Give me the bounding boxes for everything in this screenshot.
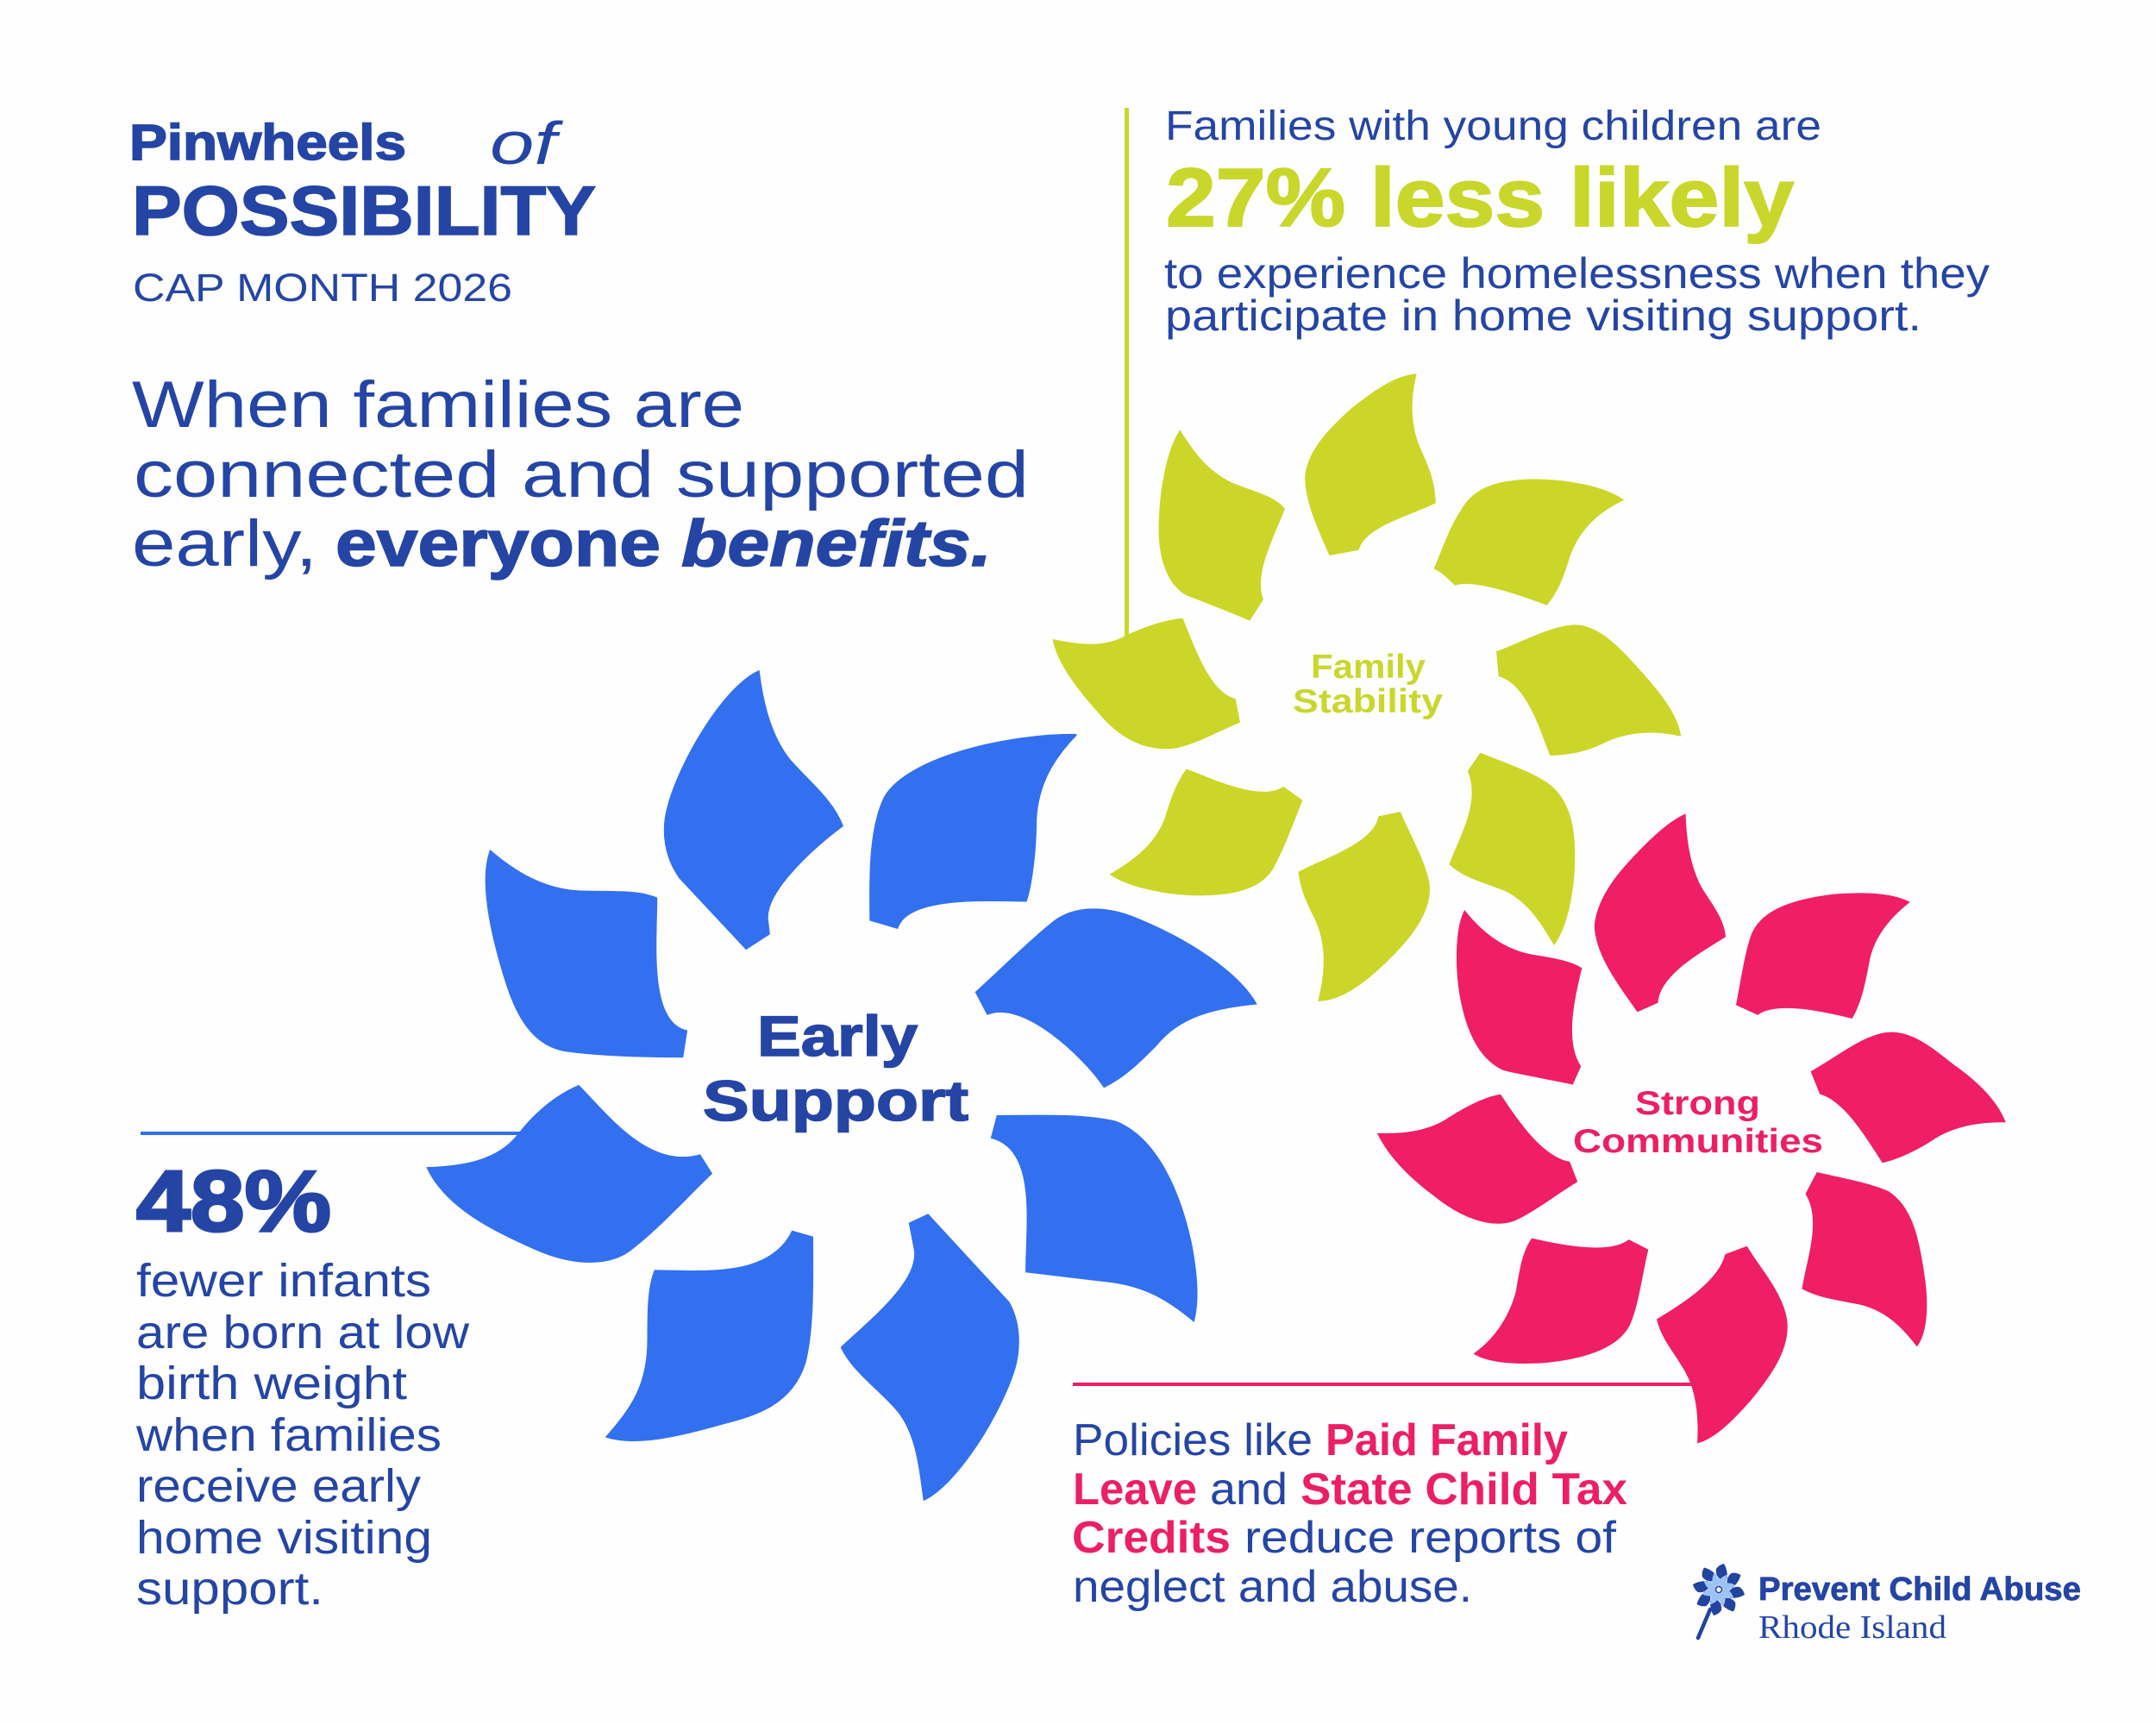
callout: 48% fewer infants: home visiting bbox=[136, 1512, 432, 1564]
pinwheel: early support bbox=[428, 671, 1256, 1500]
title: Pinwheels of Possibility: Pinwheels bbox=[129, 115, 406, 171]
label: early support: Early bbox=[757, 1004, 918, 1068]
callout: policies: reduce reports of bbox=[1244, 1513, 1617, 1563]
icon: small pinwheel bbox=[1693, 1564, 1745, 1638]
callout: 27% less likely: Families with young children are bbox=[1165, 104, 1821, 149]
callout: 27% less likely: participate in home visiting support. bbox=[1165, 292, 1921, 340]
title: Pinwheels of Possibility: of bbox=[490, 110, 564, 177]
headline statement: When families are bbox=[132, 368, 744, 442]
subtitle: CAP Month 2026: CAP MONTH 2026 bbox=[133, 266, 512, 310]
callout: 48% fewer infants: are born at low bbox=[136, 1307, 470, 1358]
headline statement: connected and supported bbox=[134, 438, 1029, 511]
title: Pinwheels of Possibility: POSSIBILITY bbox=[132, 172, 596, 250]
label: family stability: Family bbox=[1311, 649, 1426, 686]
callout: 27% less likely: 27% less likely bbox=[1166, 152, 1794, 244]
label: family stability bbox=[1293, 649, 1443, 720]
callout: policies: neglect and abuse. bbox=[1073, 1562, 1472, 1612]
headline statement: early, bbox=[132, 507, 317, 580]
connector line: strong communities bbox=[1073, 1383, 1695, 1386]
headline statement: benefits. bbox=[681, 507, 992, 580]
callout: policies: State Child Tax bbox=[1300, 1465, 1627, 1515]
title: Pinwheels of Possibility bbox=[129, 110, 596, 250]
label: early support: Support bbox=[703, 1069, 968, 1132]
logo: Prevent Child Abuse Rhode Island: Prevent Child Abuse bbox=[1758, 1571, 2081, 1608]
pinwheel: family stability bbox=[1053, 374, 1680, 1000]
callout: 27% less likely bbox=[1164, 104, 1990, 340]
label: strong communities bbox=[1573, 1085, 1823, 1160]
callout: policies: Paid Family bbox=[1326, 1415, 1568, 1465]
callout: 48% fewer infants: support. bbox=[136, 1563, 323, 1615]
headline statement: everyone bbox=[335, 507, 661, 580]
callout: 48% fewer infants: birth weight bbox=[136, 1358, 407, 1409]
callout: 48% fewer infants: when families bbox=[135, 1409, 442, 1461]
logo: Prevent Child Abuse Rhode Island bbox=[1693, 1564, 2081, 1646]
label: family stability: Stability bbox=[1293, 683, 1443, 720]
callout: policies: Policies like bbox=[1073, 1415, 1313, 1465]
label: early support bbox=[703, 1004, 968, 1132]
callout: 48% fewer infants: fewer infants bbox=[136, 1255, 431, 1307]
connector line: family stability bbox=[1125, 108, 1129, 638]
headline statement bbox=[132, 368, 1029, 580]
logo: Prevent Child Abuse Rhode Island: Rhode Island bbox=[1758, 1609, 1946, 1646]
callout: 27% less likely: to experience homelessness when they bbox=[1164, 249, 1990, 298]
callout: 48% fewer infants bbox=[135, 1153, 470, 1615]
connector line: early support bbox=[141, 1132, 520, 1135]
label: strong communities: Communities bbox=[1573, 1123, 1823, 1160]
pinwheel: strong communities bbox=[1378, 814, 2005, 1443]
callout: policies: and bbox=[1210, 1465, 1288, 1515]
callout: policies bbox=[1072, 1415, 1627, 1612]
callout: 48% fewer infants: receive early bbox=[136, 1460, 421, 1512]
callout: policies: Credits bbox=[1072, 1513, 1231, 1563]
callout: 48% fewer infants: 48% bbox=[136, 1153, 331, 1250]
label: strong communities: Strong bbox=[1635, 1085, 1760, 1122]
callout: policies: Leave bbox=[1073, 1465, 1197, 1515]
